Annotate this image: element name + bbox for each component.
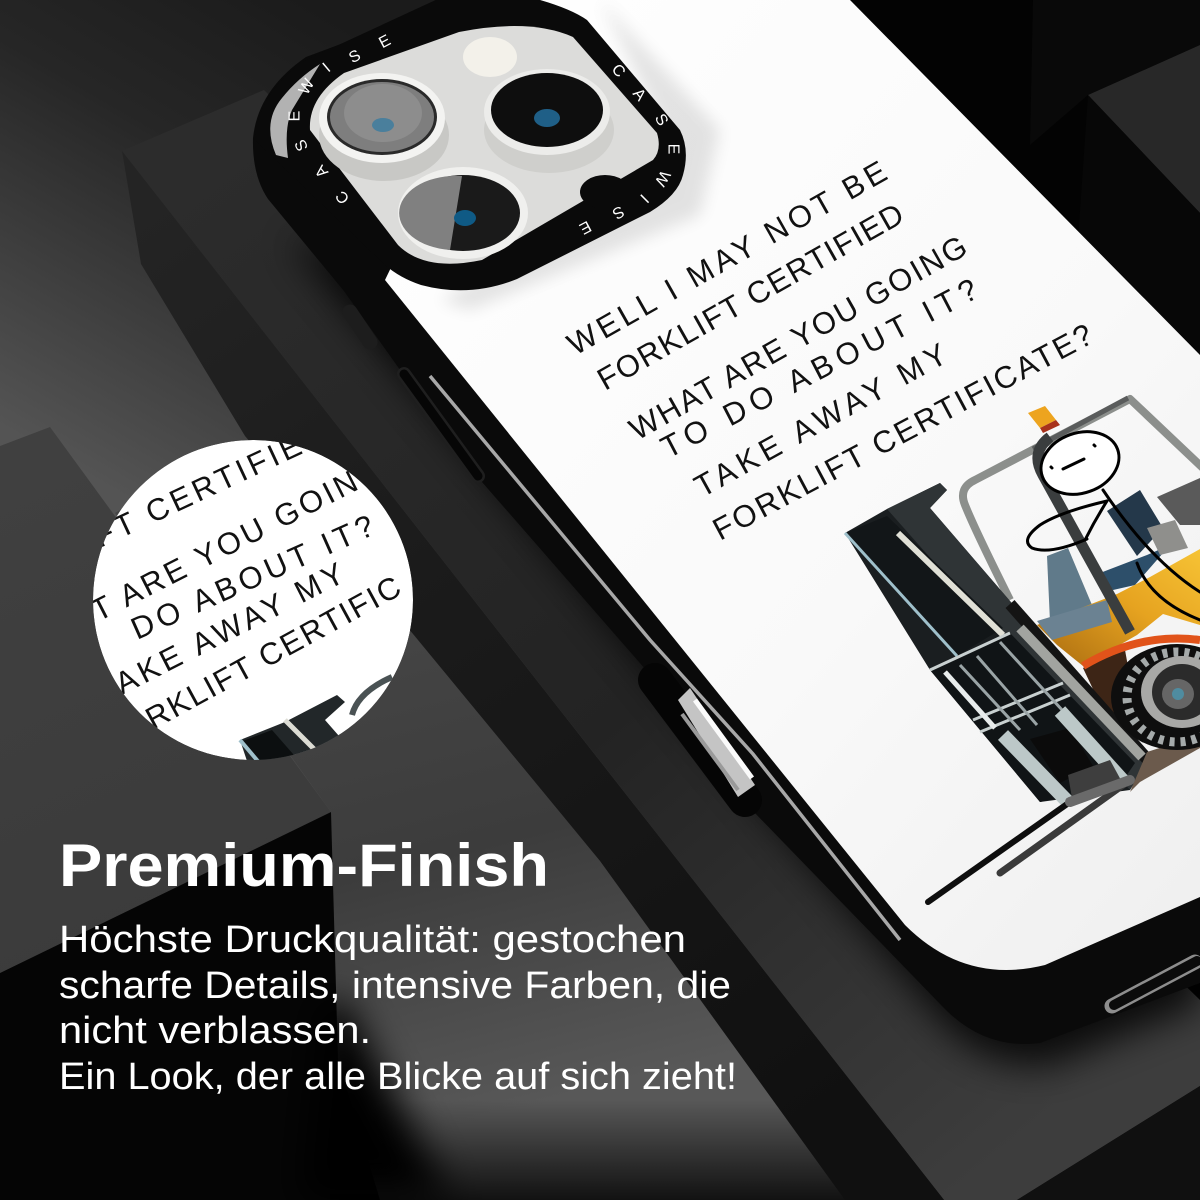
phone shadow: [290, 240, 1200, 1065]
heading: Premium-Finish: [59, 832, 549, 899]
silver lip: [270, 64, 320, 158]
handwritten quote on phone: TAKE AWAY MY: [688, 336, 953, 504]
overhead guard: [963, 398, 1200, 600]
handwritten quote on phone: WHAT ARE YOU GOING: [623, 229, 973, 447]
mute switch: [350, 312, 370, 342]
forks: [928, 780, 1130, 902]
handwritten quote on phone: WELL I MAY NOT BE: [561, 154, 893, 362]
light wall behind the blocks: [115, 436, 845, 1200]
stick figure: [1028, 421, 1200, 620]
CASEWISE lettering right: W: [650, 167, 673, 190]
engine: [1157, 478, 1200, 525]
volume button: [404, 374, 478, 476]
microphone sensor: [580, 175, 630, 209]
forklift illustration: [845, 398, 1200, 902]
zoomed handwriting: DO ABOUT IT?: [126, 508, 379, 646]
body text: Ein Look, der alle Blicke auf sich zieht!: [59, 1056, 737, 1098]
phone white back: [385, 0, 1200, 970]
body text: nicht verblassen.: [59, 1010, 371, 1052]
zoomed handwriting: FT CERTIFIE: [88, 428, 307, 554]
charging port: [1112, 961, 1197, 1006]
zoomed handwriting: T ARE YOU GOIN: [85, 464, 363, 628]
ground shadow: [1130, 746, 1200, 792]
lower right floor: [1017, 1086, 1200, 1200]
CASEWISE lettering right: A: [629, 85, 649, 105]
beacon light: [1028, 406, 1060, 433]
CASEWISE lettering right: [576, 61, 682, 237]
seat: [1100, 490, 1188, 590]
camera bumper ring: [255, 0, 686, 290]
CASEWISE lettering left: [286, 32, 394, 207]
CASEWISE lettering right: E: [664, 144, 682, 154]
lens: lower: [398, 167, 528, 259]
magnifier circle with zoomed detail: [85, 428, 413, 772]
CASEWISE lettering right: S: [609, 202, 627, 222]
CASEWISE lettering left: W: [296, 75, 319, 98]
CASEWISE lettering left: I: [320, 60, 334, 76]
yellow body: [1037, 549, 1200, 666]
mast: [845, 483, 1147, 802]
lens: upper left: [319, 73, 449, 181]
zoomed forklift top: [240, 677, 392, 772]
case edge highlight: [430, 376, 900, 940]
handwritten quote on phone: FORKLIFT CERTIFICATE?: [707, 317, 1099, 547]
handwritten quote on phone: TO DO ABOUT IT?: [655, 272, 983, 465]
flash: [463, 37, 517, 77]
body text: [59, 919, 737, 1098]
CASEWISE lettering right: I: [636, 190, 652, 206]
body text: scharfe Details, intensive Farben, die: [59, 965, 731, 1007]
zoomed handwriting: RKLIFT CERTIFIC: [140, 569, 407, 736]
CASEWISE lettering right: E: [576, 217, 594, 237]
front post: [1038, 437, 1130, 632]
floor fade: [330, 1100, 890, 1200]
CASEWISE lettering right: C: [608, 61, 628, 81]
fork carriage: [930, 633, 1135, 802]
left block top: [0, 427, 331, 973]
power button: [655, 680, 755, 800]
camera island: [255, 0, 686, 290]
handwritten quote on phone: [561, 154, 1099, 547]
CASEWISE lettering left: E: [286, 111, 304, 121]
phone: [253, 0, 1200, 1044]
phone case body: [253, 0, 1200, 1044]
camera glass plate: [310, 26, 659, 264]
CASEWISE lettering left: S: [292, 137, 312, 153]
lens: upper right: [484, 69, 614, 173]
handwritten quote on phone: FORKLIFT CERTIFIED: [591, 196, 910, 397]
CASEWISE lettering left: C: [333, 187, 353, 207]
CASEWISE lettering left: E: [376, 32, 394, 52]
CASEWISE lettering left: A: [312, 161, 332, 181]
body text: Höchste Druckqualität: gestochen: [59, 919, 686, 961]
circle background: [93, 440, 413, 760]
steering column: [1047, 548, 1092, 622]
upper block side face: [122, 151, 944, 1200]
zoomed handwriting: AKE AWAY MY: [109, 556, 350, 701]
wheel arch: [1083, 638, 1200, 725]
left block front: [0, 812, 380, 1200]
camera soft shadow on phone: [440, 0, 720, 310]
wheel: [1111, 644, 1200, 750]
CASEWISE lettering left: S: [346, 47, 364, 67]
CASEWISE lettering right: S: [651, 111, 671, 129]
zoomed handwriting: [93, 442, 400, 728]
right black backdrop: [700, 0, 1200, 1200]
